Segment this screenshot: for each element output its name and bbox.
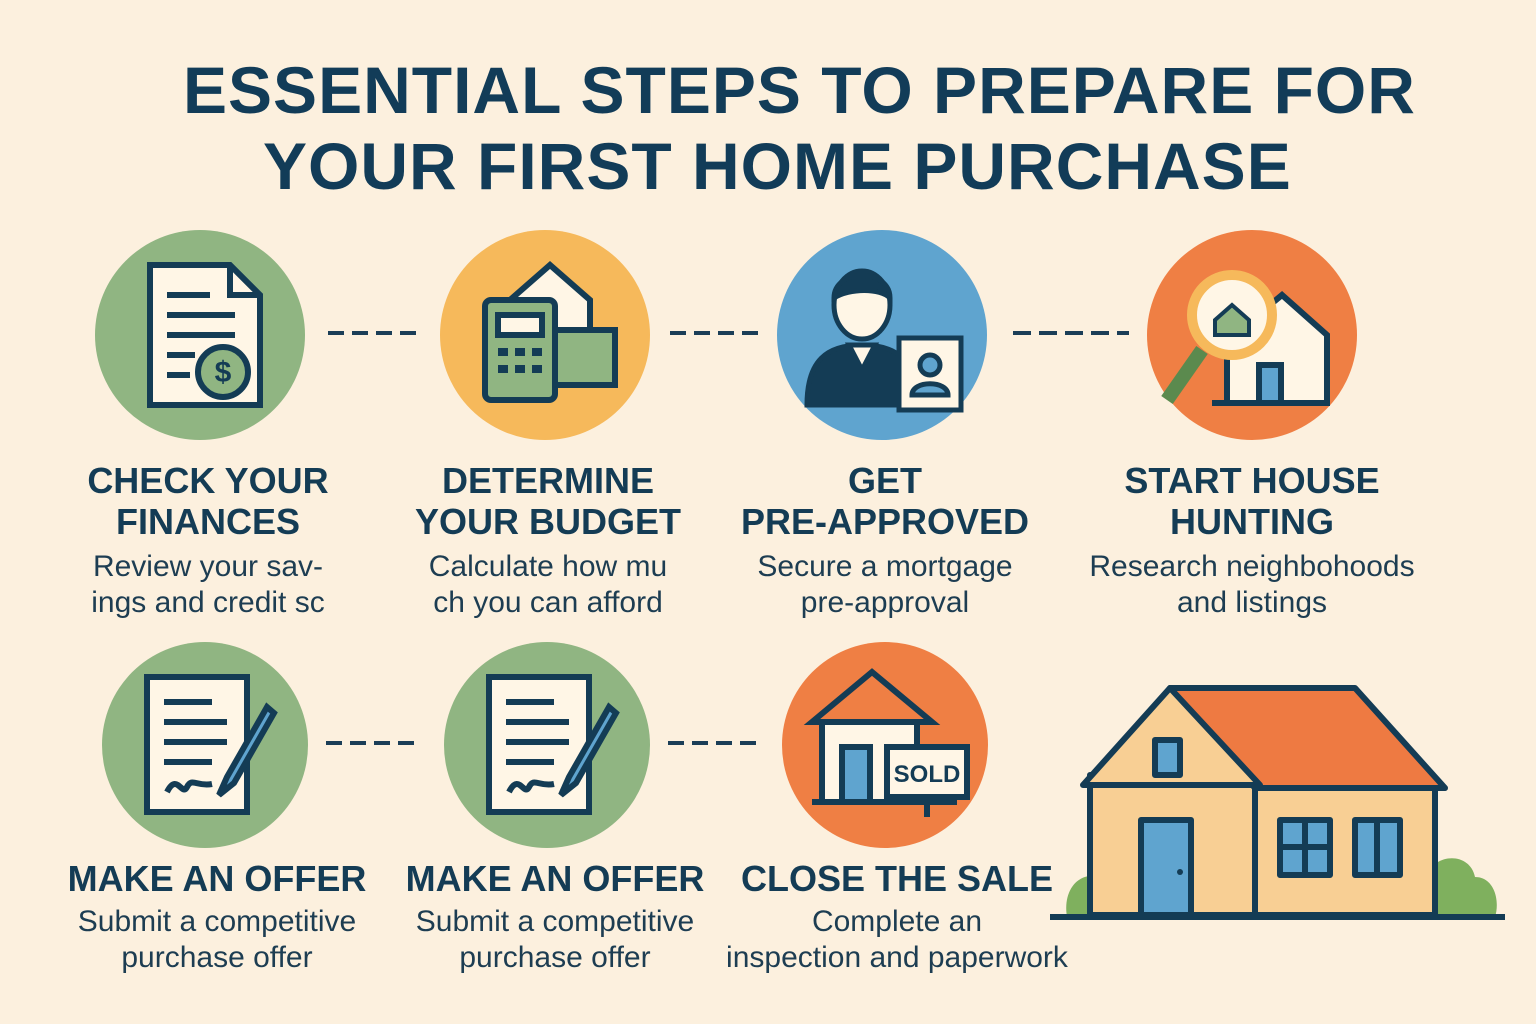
description: ings and credit sc xyxy=(91,586,325,619)
dashed connector xyxy=(326,741,414,745)
step 5 text xyxy=(68,858,366,974)
description: and listings xyxy=(1177,586,1327,619)
description: Secure a mortgage xyxy=(757,550,1013,583)
description xyxy=(429,550,667,619)
description: Calculate how mu xyxy=(429,550,667,583)
dashed connector xyxy=(328,331,416,335)
description: ch you can afford xyxy=(433,586,663,619)
description xyxy=(1089,550,1415,619)
heading: MAKE AN OFFER xyxy=(68,858,366,899)
step 3 text xyxy=(741,460,1029,619)
title: YOUR FIRST HOME PURCHASE xyxy=(263,129,1292,203)
heading: YOUR BUDGET xyxy=(415,501,681,542)
heading: HUNTING xyxy=(1170,501,1334,542)
heading: FINANCES xyxy=(116,501,300,542)
step 4 icon: house hunting xyxy=(1147,230,1357,440)
description xyxy=(78,905,356,974)
step 7 icon: sold: SOLD xyxy=(894,761,960,788)
dashed connector xyxy=(1013,331,1129,335)
heading: START HOUSE xyxy=(1124,460,1380,501)
heading xyxy=(415,460,681,542)
heading: CHECK YOUR xyxy=(87,460,329,501)
dashed connector xyxy=(670,331,758,335)
description: pre-approval xyxy=(801,586,969,619)
heading: PRE-APPROVED xyxy=(741,501,1029,542)
step 3 icon: pre-approved xyxy=(777,230,987,440)
title: ESSENTIAL STEPS TO PREPARE FOR xyxy=(183,53,1416,127)
description xyxy=(757,550,1013,619)
description xyxy=(416,905,694,974)
dashed connector xyxy=(668,741,756,745)
description: Review your sav- xyxy=(93,550,323,583)
step 7 text xyxy=(726,858,1068,974)
description xyxy=(91,550,325,619)
heading: GET xyxy=(848,460,922,501)
step 4 text xyxy=(1089,460,1415,619)
description: purchase offer xyxy=(459,941,651,974)
description xyxy=(726,905,1068,974)
step 6 text xyxy=(406,858,704,974)
description: Research neighbohoods xyxy=(1089,550,1415,583)
step 6 icon: offer xyxy=(444,642,650,848)
heading xyxy=(1124,460,1380,542)
house illustration xyxy=(1050,685,1505,920)
step 1 text xyxy=(87,460,329,619)
heading: MAKE AN OFFER xyxy=(406,858,704,899)
step 2 text xyxy=(415,460,681,619)
step 2 icon: budget xyxy=(440,230,650,440)
title xyxy=(183,53,1416,203)
description: inspection and paperwork xyxy=(726,941,1068,974)
heading xyxy=(87,460,329,542)
step 7 icon: sold xyxy=(782,642,988,848)
heading xyxy=(741,460,1029,542)
step 1 icon: finances: $ xyxy=(215,356,232,389)
step 5 icon: offer xyxy=(102,642,308,848)
heading: CLOSE THE SALE xyxy=(741,858,1053,899)
description: purchase offer xyxy=(121,941,313,974)
description: Complete an xyxy=(812,905,982,938)
heading: DETERMINE xyxy=(442,460,654,501)
description: Submit a competitive xyxy=(78,905,356,938)
description: Submit a competitive xyxy=(416,905,694,938)
step 1 icon: finances xyxy=(95,230,305,440)
